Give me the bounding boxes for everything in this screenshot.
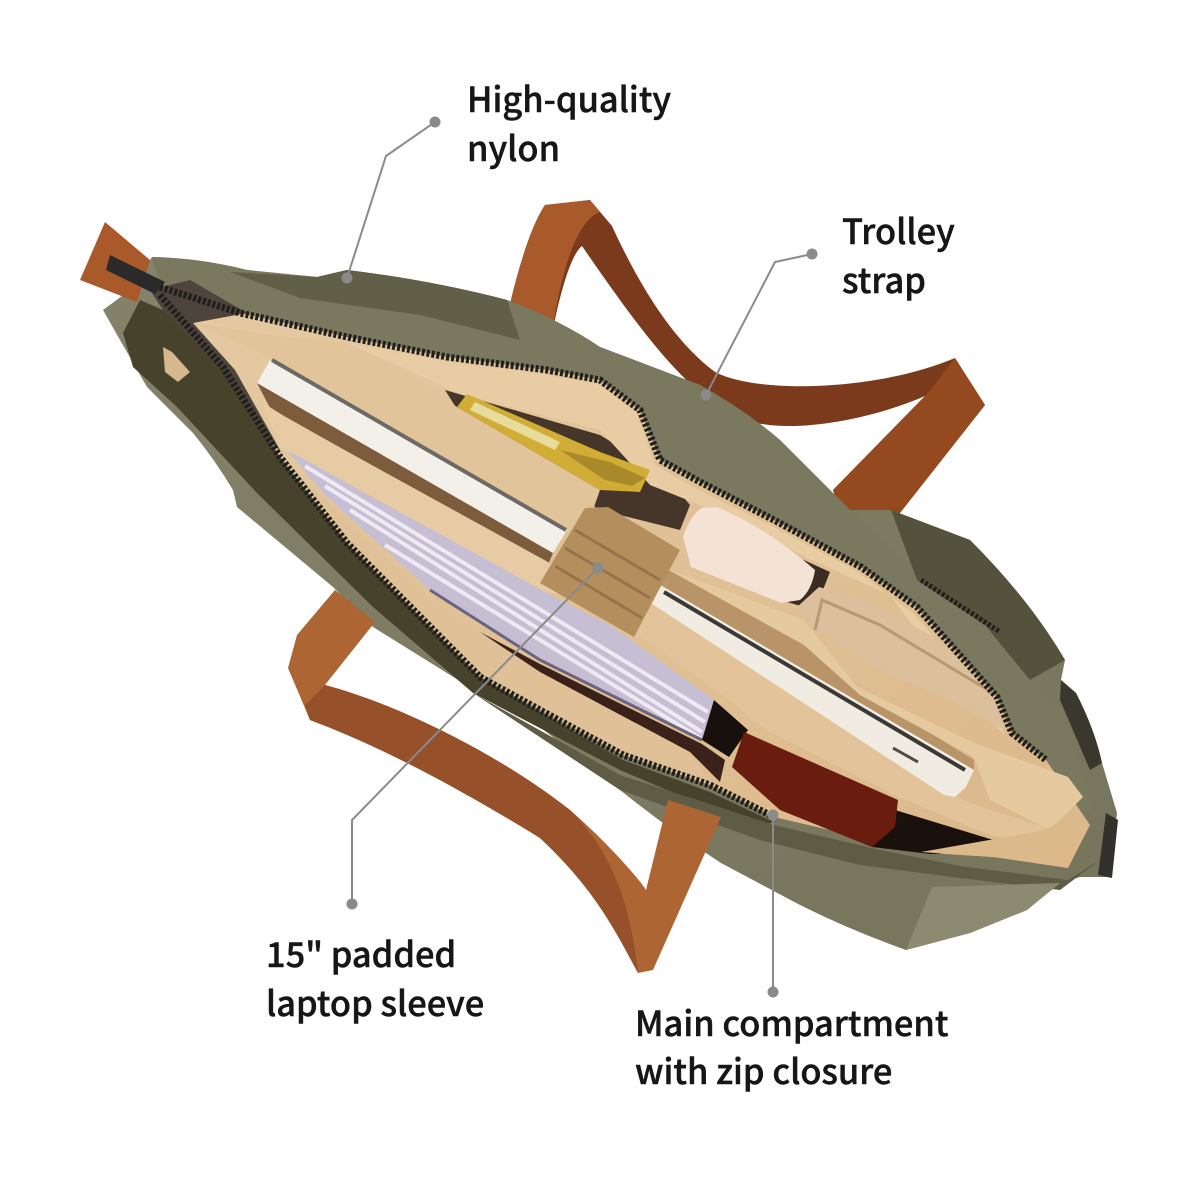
callout: padded laptop sleeve: laptop sleeve (266, 976, 484, 1026)
top rim band (152, 257, 1100, 825)
front rim highlight (473, 693, 1100, 890)
dark gap behind phone and earbuds (445, 390, 690, 530)
callout: main compartment (635, 810, 949, 1094)
inner lining base (193, 313, 1090, 868)
bottom lining corner (921, 815, 1068, 863)
callout: trolley strap: Trolley (842, 204, 955, 254)
pouch (797, 587, 1004, 730)
dark gap right of earbud (760, 540, 830, 610)
papers (287, 450, 748, 757)
dark-brown channel beside laptop (257, 383, 553, 565)
earbud case (683, 507, 815, 603)
callout: padded laptop sleeve (266, 562, 604, 1026)
callout: main compartment: with zip closure (635, 1044, 892, 1094)
dark sliver under papers (480, 632, 725, 782)
lower lining fold (632, 600, 1046, 845)
upper lining strip along zip (347, 343, 1005, 735)
callout: padded laptop sleeve: 15" padded (266, 927, 456, 977)
lower lining strip (303, 480, 710, 785)
callout: high-quality nylon (342, 72, 671, 284)
callout: trolley strap: strap (842, 253, 926, 303)
callout: main compartment: Main compartment (635, 996, 949, 1046)
zipper: lower (160, 295, 774, 817)
lower corner gusset (906, 883, 1060, 950)
front inner wall: dark band (123, 300, 774, 825)
zipper: far pocket (921, 580, 1000, 632)
lining fold under laptop (262, 402, 600, 600)
under-fold shade right (657, 568, 974, 770)
top lining fold over laptop (193, 323, 600, 530)
side hardware buckle (1098, 813, 1118, 878)
dark gap near wallet (872, 810, 1045, 854)
laptop left section (257, 360, 567, 553)
callout: high-quality nylon: nylon (467, 121, 560, 171)
bag body: olive nylon (103, 257, 1117, 950)
zip puller tab (80, 222, 165, 302)
zip tape grain near puller (150, 280, 280, 450)
front handle: leather strap (288, 590, 721, 973)
back handle: trolley side leather strap (503, 200, 985, 532)
left lining scrap (163, 347, 190, 382)
gold phone (457, 394, 650, 492)
callout: high-quality nylon: High-quality (467, 72, 671, 122)
right far panel (891, 510, 1065, 680)
red-brown leather wallet (732, 732, 898, 847)
upper lining fold right (665, 568, 1083, 830)
upper pocket panel (230, 270, 520, 340)
laptop right section (646, 583, 974, 797)
zipper: upper (160, 287, 1046, 760)
callout: trolley strap (700, 204, 955, 400)
right end dark side (1060, 680, 1102, 770)
elastic band (540, 507, 680, 637)
